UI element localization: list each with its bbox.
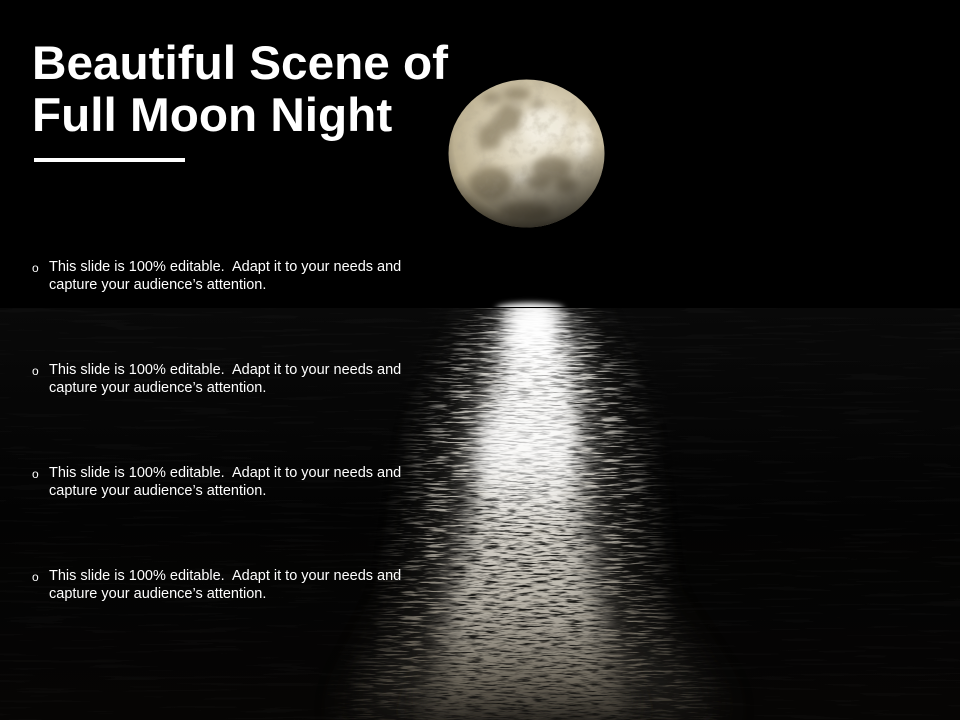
bullet text 3: capture your audience’s attention. <box>49 483 266 499</box>
bullet text 3 <box>32 465 401 499</box>
title: Full Moon Night <box>32 89 392 142</box>
bullet text 2 <box>32 362 401 396</box>
bullet text 2: capture your audience’s attention. <box>49 380 266 396</box>
horizon moon glow <box>492 298 568 307</box>
bullet text 2: This slide is 100% editable. Adapt it to your needs and <box>49 362 401 378</box>
bullet text 4: capture your audience’s attention. <box>49 586 266 602</box>
moon <box>448 79 606 229</box>
bullet text 4: o <box>32 570 39 584</box>
bullet text 4 <box>32 568 401 602</box>
bullet text 2: o <box>32 364 39 378</box>
bullet text 1 <box>32 259 401 293</box>
bullet text 1: This slide is 100% editable. Adapt it to your needs and <box>49 259 401 275</box>
bullet text 4: This slide is 100% editable. Adapt it to your needs and <box>49 568 401 584</box>
title: Beautiful Scene of <box>32 37 448 90</box>
sky <box>0 0 960 308</box>
moonlight base haze <box>366 319 700 720</box>
sea <box>0 300 960 720</box>
bullet text 1: capture your audience’s attention. <box>49 277 266 293</box>
bright reflection core <box>410 308 640 720</box>
bullet text 3: o <box>32 467 39 481</box>
brightest reflection patch <box>475 300 575 530</box>
title underline <box>34 158 185 162</box>
moonlight glitter <box>340 308 720 720</box>
bullet text 3: This slide is 100% editable. Adapt it to your needs and <box>49 465 401 481</box>
title <box>32 37 448 142</box>
bullet text 1: o <box>32 261 39 275</box>
